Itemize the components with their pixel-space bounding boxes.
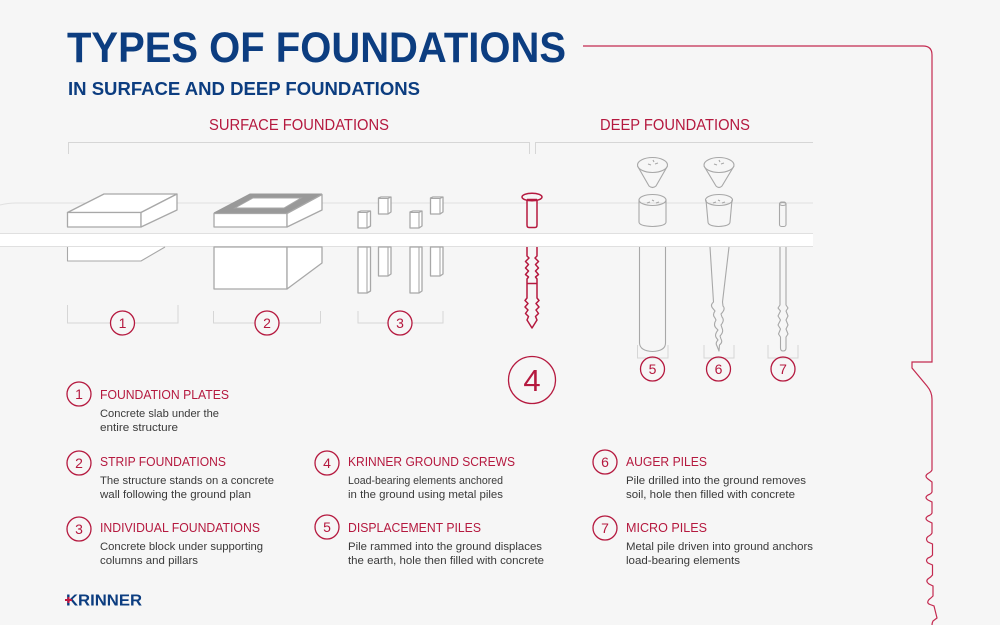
item 7: micro piles: MICRO PILES bbox=[626, 520, 707, 535]
marker 4: 4 bbox=[523, 363, 541, 398]
item 2: strip foundations: The structure stands on a concrete bbox=[100, 475, 274, 487]
item 6: auger piles bbox=[593, 450, 806, 501]
item 3: individual foundations: Concrete block under supporting bbox=[100, 541, 263, 553]
item 4: krinner ground screws: Load-bearing elements anchored bbox=[348, 475, 503, 487]
item 3: individual foundations bbox=[67, 517, 263, 567]
item 3: individual foundations: columns and pillars bbox=[100, 555, 198, 567]
foundation 7: micro pile: 7 bbox=[779, 361, 787, 377]
ground band edges bbox=[0, 234, 813, 246]
foundation 1: plate bbox=[68, 194, 177, 261]
item 6: auger piles: Pile drilled into the ground removes bbox=[626, 475, 806, 487]
surface foundations heading: SURFACE FOUNDATIONS bbox=[209, 117, 389, 134]
foundation 6: auger pile bbox=[704, 158, 734, 381]
item 6: auger piles: soil, hole then filled with concrete bbox=[626, 489, 795, 501]
surface foundations bracket bbox=[68, 142, 530, 154]
item 6: auger piles: AUGER PILES bbox=[626, 454, 707, 469]
item 7: micro piles: 7 bbox=[601, 520, 609, 536]
item 5: displacement piles: Pile rammed into the ground displaces bbox=[348, 541, 542, 553]
ground band bbox=[0, 234, 813, 246]
screw outline decoration line bbox=[583, 46, 937, 625]
marker 3: 3 bbox=[396, 315, 404, 331]
item 2: strip foundations: wall following the ground plan bbox=[99, 489, 251, 501]
foundation 5: displacement pile: 5 bbox=[649, 361, 657, 377]
marker 1: 1 bbox=[119, 315, 127, 331]
item 6: auger piles: 6 bbox=[601, 454, 609, 470]
item 4: krinner ground screws: in the ground using metal piles bbox=[348, 489, 503, 501]
item 2: strip foundations: 2 bbox=[75, 455, 83, 471]
item 5: displacement piles: DISPLACEMENT PILES bbox=[348, 520, 481, 535]
item 4: krinner ground screws: KRINNER GROUND SCREWS bbox=[348, 454, 515, 469]
item 4: krinner ground screws bbox=[315, 451, 515, 501]
foundation 2: strip bbox=[214, 194, 322, 289]
item 7: micro piles: load-bearing elements bbox=[626, 555, 740, 567]
foundation 7: micro pile bbox=[768, 202, 798, 381]
item 2: strip foundations: STRIP FOUNDATIONS bbox=[100, 454, 226, 469]
subtitle: IN SURFACE AND DEEP FOUNDATIONS bbox=[68, 78, 420, 99]
title: TYPES OF FOUNDATIONS bbox=[67, 24, 566, 72]
item 5: displacement piles: the earth, hole then filled with concrete bbox=[348, 555, 544, 567]
item 7: micro piles bbox=[593, 516, 813, 567]
marker 2: 2 bbox=[263, 315, 271, 331]
item 1: foundation plates: FOUNDATION PLATES bbox=[100, 387, 229, 402]
deep foundations heading: DEEP FOUNDATIONS bbox=[600, 117, 750, 134]
ground surface line bbox=[0, 203, 813, 205]
marker 1 bbox=[68, 305, 178, 335]
foundation 6: auger pile: 6 bbox=[715, 361, 723, 377]
foundation 5: displacement pile bbox=[638, 158, 668, 381]
marker 4 bbox=[508, 356, 556, 404]
item 5: displacement piles bbox=[315, 515, 544, 567]
item 7: micro piles: Metal pile driven into ground anchors bbox=[626, 541, 813, 553]
marker 2 bbox=[214, 311, 320, 335]
foundation 3: individual blocks bbox=[358, 197, 443, 293]
item 3: individual foundations: INDIVIDUAL FOUNDATIONS bbox=[100, 520, 260, 535]
item 3: individual foundations: 3 bbox=[75, 521, 83, 537]
krinner logo: KRINNER bbox=[66, 592, 142, 610]
item 1: foundation plates: Concrete slab under the bbox=[100, 408, 219, 420]
item 4: krinner ground screws: 4 bbox=[323, 455, 331, 471]
item 2: strip foundations bbox=[67, 451, 274, 501]
item 5: displacement piles: 5 bbox=[323, 519, 331, 535]
deep foundations bracket bbox=[536, 142, 813, 154]
item 1: foundation plates bbox=[67, 382, 229, 434]
item 1: foundation plates: 1 bbox=[75, 386, 83, 402]
foundation 4: ground screw bbox=[522, 193, 542, 328]
item 1: foundation plates: entire structure bbox=[100, 422, 178, 434]
marker 3 bbox=[358, 311, 443, 335]
